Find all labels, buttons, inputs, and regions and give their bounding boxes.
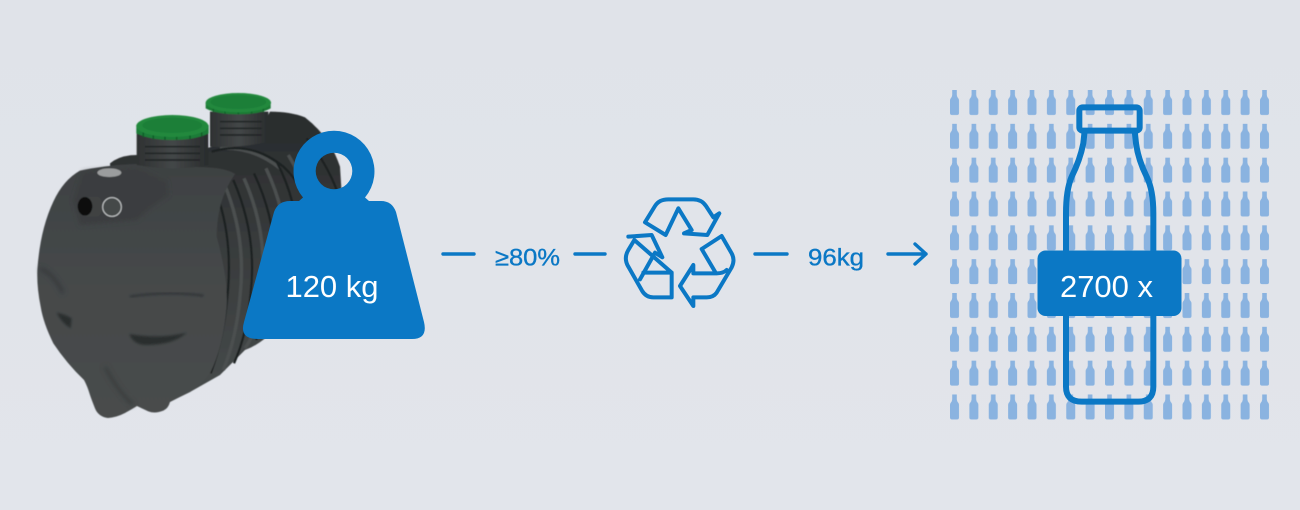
- label: 2700 x: [1038, 250, 1182, 316]
- inlet pipe ports: [78, 168, 121, 217]
- grid of small bottles: [950, 90, 1270, 420]
- front shell relief: [40, 167, 203, 405]
- dash left of 96 kg: [755, 252, 787, 256]
- label: 96 kg: 96kg: [808, 244, 864, 272]
- front shell: [37, 164, 235, 418]
- recycling symbol: [626, 199, 733, 306]
- large bottle outline: [1066, 107, 1153, 402]
- label: at least 80 percent: ≥80%: [495, 244, 560, 272]
- arrow: [888, 244, 926, 264]
- front neck and green cap: [136, 115, 209, 168]
- label: 2700 x: 2700 x: [1060, 269, 1154, 304]
- 3D septic tank: [37, 93, 342, 418]
- dash right of 80 percent: [575, 252, 605, 256]
- dash left of 80 percent: [443, 252, 474, 256]
- weight icon: 120 kg: [243, 131, 425, 339]
- weight icon: 120 kg: 120 kg: [285, 269, 379, 304]
- tank rear ribbed body: [110, 112, 342, 410]
- rear neck and green cap: [206, 93, 271, 147]
